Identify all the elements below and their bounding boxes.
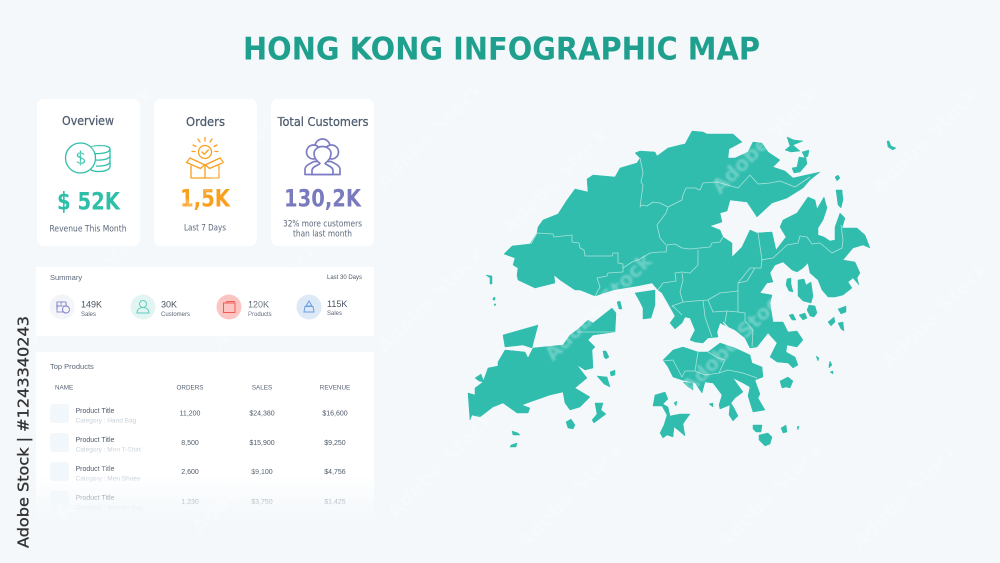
table header: ORDERS — [177, 384, 203, 392]
overview caption: Revenue This Month — [50, 224, 126, 234]
watermark: Adobe Stock — [172, 101, 289, 219]
row 4: Product Title — [76, 495, 115, 502]
orders caption: Last 7 Days — [184, 224, 226, 234]
row 2 — [50, 433, 346, 454]
date range: Last 30 Days — [327, 275, 362, 281]
watermark: Adobe Stock — [847, 436, 964, 554]
watermark: Adobe Stock — [207, 236, 324, 354]
row 4: Category : Woman Bag — [76, 504, 143, 512]
watermark: Adobe Stock — [372, 76, 489, 194]
stat: sales: Sales — [81, 312, 96, 318]
map: district boundaries — [531, 158, 843, 378]
row 3: Product Title — [76, 466, 115, 473]
row 1: Category : Hand Bag — [76, 418, 137, 424]
customers caption: than last month — [293, 230, 352, 240]
panel: total customers — [271, 99, 374, 246]
table header: REVENUE — [320, 384, 350, 392]
customers caption — [283, 220, 362, 240]
watermark: Adobe Stock — [867, 81, 984, 199]
map: Hong Kong — [468, 131, 896, 447]
icon: coins — [66, 143, 110, 173]
Chek Lap Kok — [503, 325, 538, 348]
stock id label: Adobe Stock | #1243340243 — [14, 316, 32, 548]
row 4: $1,425 — [324, 499, 346, 506]
stat: customers: Customers — [161, 312, 190, 318]
watermark: Adobe Stock — [382, 406, 499, 524]
row 1: Product Title — [76, 408, 115, 415]
row 3: Category : Men Shoes — [76, 476, 141, 482]
row 1: 11,200 — [180, 410, 201, 418]
watermark: Adobe Stock — [677, 281, 794, 399]
row 1: $24,380 — [249, 410, 275, 418]
stat: customers — [130, 294, 190, 320]
Tsing Yi — [635, 290, 655, 319]
summary heading: Summary — [50, 273, 82, 282]
map: harbour inlet — [723, 322, 735, 335]
row 1: $16,600 — [322, 410, 348, 418]
stat: products: Products — [248, 312, 272, 318]
Lamma — [653, 392, 690, 438]
icon: people — [305, 139, 340, 174]
orders value: 1,5K — [180, 184, 231, 212]
row 3: $4,756 — [324, 469, 346, 476]
row 4: 1,230 — [181, 499, 199, 506]
row 3: 2,600 — [181, 469, 199, 476]
map: land areas — [468, 131, 896, 447]
stat: sales: 149K — [81, 300, 102, 310]
row 3: $9,100 — [251, 469, 273, 476]
stat: sales 2: 115K — [327, 299, 347, 309]
watermark: Adobe Stock — [877, 256, 994, 374]
watermark: Adobe Stock — [512, 436, 629, 554]
table header: SALES — [252, 384, 272, 392]
watermark: Adobe Stock — [540, 248, 657, 366]
small islands — [617, 301, 622, 309]
customers caption: 32% more customers — [283, 220, 362, 230]
watermark: Adobe Stock — [497, 121, 614, 239]
row 2: Category : Men T-Shirt — [76, 446, 141, 454]
row 2: $9,250 — [324, 440, 346, 447]
row 2: Product Title — [76, 437, 115, 444]
Hong Kong Island — [663, 343, 765, 421]
row 2: 8,500 — [181, 440, 199, 447]
stat: sales 2 — [296, 294, 347, 320]
row 1 — [50, 404, 348, 424]
row 4: $3,750 — [251, 499, 273, 506]
table header: NAME — [55, 384, 73, 392]
orders heading: Orders — [186, 115, 225, 129]
overview heading: Overview — [62, 114, 114, 128]
title: HONG KONG INFOGRAPHIC MAP — [243, 32, 760, 68]
customers heading: Total Customers — [277, 115, 368, 129]
stat: sales 2: Sales — [327, 311, 342, 317]
stat: products — [216, 294, 272, 320]
panel: summary — [36, 267, 374, 336]
watermark: Adobe Stock — [372, 241, 489, 359]
overview value: $ 52K — [57, 188, 121, 216]
row 3 — [50, 462, 346, 482]
table heading: Top Products — [50, 362, 94, 371]
stat: sales — [50, 294, 102, 320]
stat: customers: 30K — [161, 300, 177, 310]
table header — [55, 384, 350, 392]
panel: orders — [154, 99, 257, 246]
watermark: Adobe Stock — [42, 81, 159, 199]
watermark: Adobe Stock — [22, 231, 139, 349]
watermark: Adobe Stock — [712, 436, 829, 554]
panel: top products — [36, 352, 374, 527]
watermark: Adobe Stock — [707, 81, 824, 199]
row 4 — [50, 491, 346, 512]
row 2: $15,900 — [249, 440, 275, 447]
customers value: 130,2K — [284, 184, 362, 212]
Lantau — [468, 308, 616, 420]
stat: products: 120K — [248, 300, 269, 310]
watermark: Adobe Stock — [187, 421, 304, 539]
watermark: Adobe Stock — [50, 406, 167, 524]
panel: overview — [37, 99, 140, 246]
icon: box with check — [186, 138, 224, 178]
